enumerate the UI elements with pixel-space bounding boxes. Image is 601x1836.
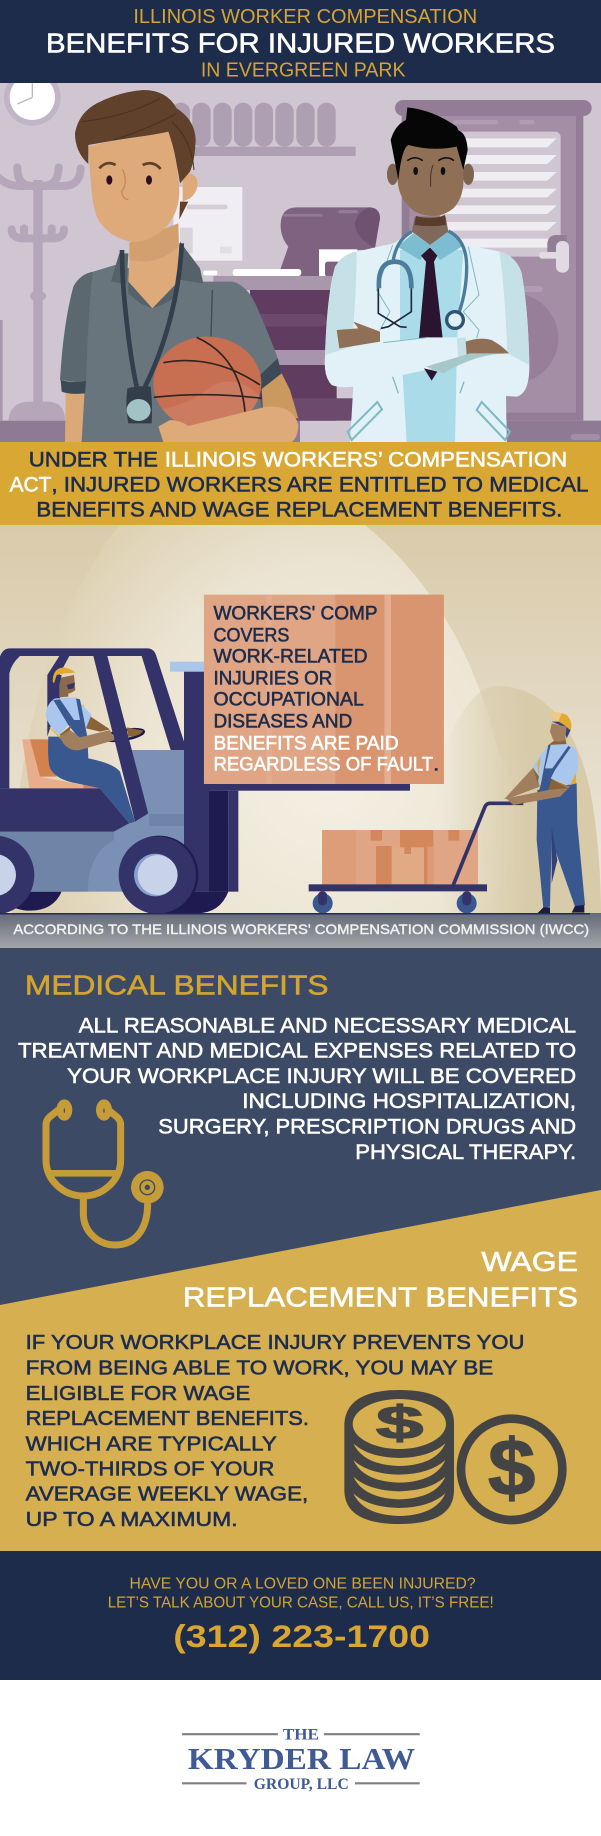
panel: call to action bbox=[0, 1551, 601, 1680]
banner: illinois workers compensation act: BENEFITS AND WAGE REPLACEMENT BENEFITS. bbox=[36, 497, 562, 521]
panel: call to action: HAVE YOU OR A LOVED ONE BEEN INJURED? bbox=[130, 1575, 476, 1592]
banner: illinois workers compensation act: ACT bbox=[10, 472, 51, 496]
body text: wage replacement: IF YOUR WORKPLACE INJURY PREVENTS YOU bbox=[26, 1330, 524, 1354]
heading: wage replacement benefits bbox=[183, 1247, 578, 1313]
man with basketball bbox=[60, 90, 298, 442]
logo: the kryder law group: KRYDER LAW bbox=[188, 1741, 415, 1776]
body text: medical benefits bbox=[18, 1014, 576, 1164]
icon: dollar coin bbox=[461, 1419, 562, 1520]
icon: coin stack bbox=[344, 1390, 454, 1524]
heading: wage replacement benefits: REPLACEMENT BENEFITS bbox=[183, 1283, 578, 1313]
crate text: COVERS bbox=[213, 625, 289, 646]
body text: medical benefits: PHYSICAL THERAPY. bbox=[355, 1140, 576, 1164]
icon: stethoscope bbox=[46, 1099, 164, 1245]
office background left bbox=[0, 69, 356, 442]
body text: wage replacement: UP TO A MAXIMUM. bbox=[26, 1507, 238, 1531]
seat bbox=[22, 739, 100, 788]
crate text bbox=[213, 603, 439, 775]
crate text: REGARDLESS OF FAULT bbox=[213, 754, 433, 775]
body text: wage replacement: ELIGIBLE FOR WAGE bbox=[26, 1381, 250, 1405]
stethoscope on doctor bbox=[378, 231, 467, 328]
body text: medical benefits: INCLUDING HOSPITALIZATION, bbox=[242, 1089, 576, 1113]
crate text: WORKERS' COMP bbox=[213, 603, 378, 624]
header: title block: IN EVERGREEN PARK bbox=[201, 58, 406, 81]
crate text: BENEFITS ARE PAID bbox=[213, 733, 399, 754]
logo: the kryder law group: THE bbox=[283, 1727, 319, 1743]
body text: wage replacement: WHICH ARE TYPICALLY bbox=[26, 1431, 277, 1455]
logo: the kryder law group bbox=[0, 1680, 601, 1836]
body text: wage replacement: TWO-THIRDS OF YOUR bbox=[26, 1456, 274, 1480]
header: title block: ILLINOIS WORKER COMPENSATION bbox=[133, 4, 477, 28]
suspended crate with text bbox=[204, 595, 444, 784]
banner: illinois workers compensation act bbox=[0, 442, 601, 525]
steering wheel bbox=[103, 727, 145, 743]
header: title block bbox=[0, 0, 601, 83]
body text: wage replacement: AVERAGE WEEKLY WAGE, bbox=[26, 1481, 308, 1505]
crate text: . bbox=[433, 754, 439, 775]
crate text: DISEASES AND bbox=[213, 711, 352, 732]
body text: wage replacement bbox=[26, 1330, 524, 1531]
crate text: OCCUPATIONAL bbox=[213, 689, 364, 710]
cart with boxes bbox=[309, 803, 523, 913]
logo: the kryder law group: GROUP, LLC bbox=[254, 1777, 349, 1793]
panel: office illustration bbox=[0, 69, 601, 442]
basketball bbox=[153, 337, 263, 433]
banner: illinois workers compensation act: ILLINOIS WORKERS’ COMPENSATION bbox=[165, 447, 567, 471]
panel: medical benefits bbox=[0, 948, 601, 1328]
heading: wage replacement benefits: WAGE bbox=[481, 1247, 578, 1277]
panel: wage replacement benefits bbox=[0, 1190, 601, 1552]
crate text: WORK-RELATED bbox=[213, 646, 368, 667]
panel: call to action: LET’S TALK ABOUT YOUR CASE, CALL US, IT’S FREE! bbox=[108, 1594, 494, 1611]
phone number: (312) 223-1700 bbox=[173, 1620, 430, 1655]
body text: wage replacement: REPLACEMENT BENEFITS. bbox=[26, 1406, 309, 1430]
header: title block: BENEFITS FOR INJURED WORKERS bbox=[46, 29, 555, 59]
crate text: INJURIES OR bbox=[213, 668, 332, 689]
fork bbox=[204, 784, 410, 791]
desk and chair bbox=[203, 207, 380, 421]
panel: warehouse scene bbox=[0, 525, 601, 915]
heading: medical benefits: MEDICAL BENEFITS bbox=[25, 970, 328, 1001]
worker pushing cart bbox=[504, 712, 585, 913]
body text: wage replacement: FROM BEING ABLE TO WORK, YOU MAY BE bbox=[26, 1355, 493, 1379]
forklift bbox=[0, 648, 238, 914]
body text: medical benefits: ALL REASONABLE AND NECESSARY MEDICAL bbox=[79, 1014, 576, 1037]
icon: coin stack: $ bbox=[376, 1396, 423, 1448]
source bar bbox=[0, 913, 601, 948]
doctor bbox=[325, 107, 529, 442]
banner: illinois workers compensation act: UNDER THE bbox=[29, 447, 158, 471]
icon: dollar coin: $ bbox=[488, 1423, 535, 1512]
driver bbox=[46, 667, 143, 823]
door and window bbox=[395, 100, 601, 442]
